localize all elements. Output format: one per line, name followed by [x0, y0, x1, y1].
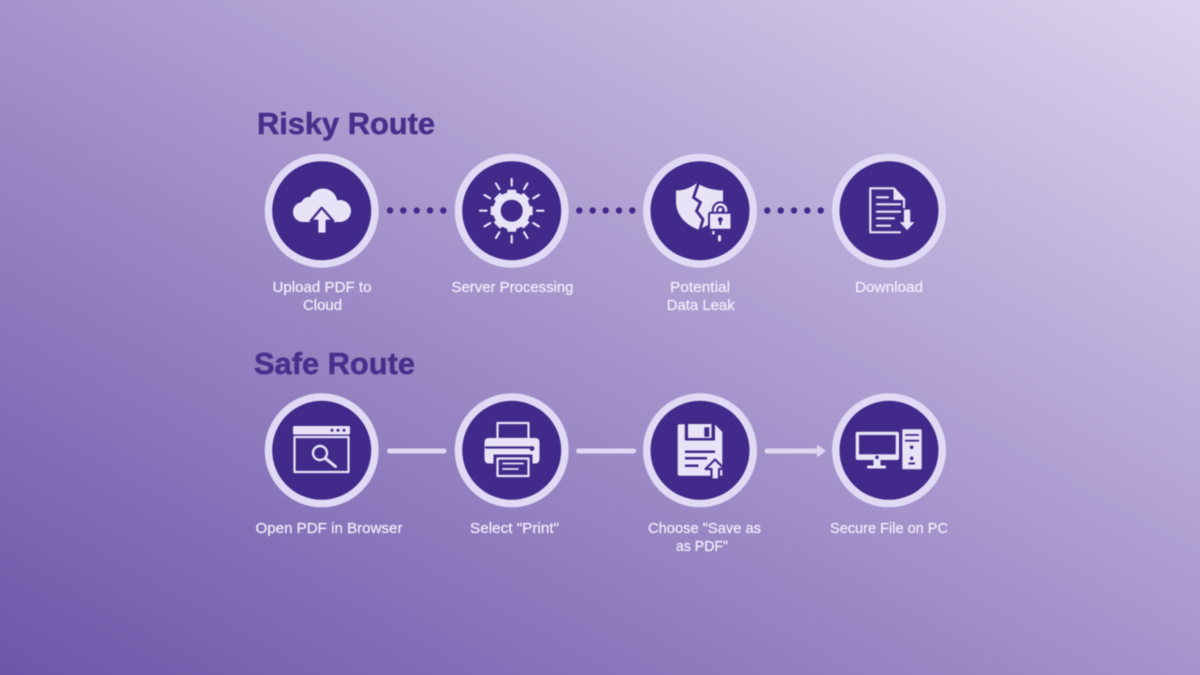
label: Server Processing [452, 279, 574, 296]
label: Data Leak [667, 297, 735, 314]
step: choose save as PDF [643, 393, 761, 555]
heading: safe route: Safe Route [254, 346, 415, 381]
step: potential data leak [643, 154, 757, 314]
step: upload PDF to cloud [265, 154, 379, 314]
icon: floppy disk with upload arrow [678, 424, 724, 480]
label: Potential [670, 279, 730, 296]
connector: dotted [576, 207, 636, 214]
label: Select "Print" [470, 520, 559, 537]
step: open PDF in browser [256, 393, 402, 537]
connector: dotted [387, 207, 446, 214]
step: download [832, 154, 946, 296]
icon: cloud upload [293, 188, 351, 234]
connector: dotted [764, 207, 824, 214]
label [648, 520, 761, 555]
icon: gear with rays [480, 179, 544, 242]
label: Choose "Save as [648, 520, 761, 537]
label: Open PDF in Browser [256, 520, 402, 537]
label [667, 279, 735, 314]
connector: arrow [767, 444, 826, 458]
icon: desktop computer [856, 429, 922, 469]
icon: printer [484, 423, 540, 476]
connector: solid line [390, 448, 444, 454]
panel: safe route [254, 346, 948, 555]
step: select print [455, 393, 569, 537]
label: as PDF" [676, 538, 728, 555]
icon: broken shield with lock [676, 183, 733, 242]
label [272, 279, 372, 314]
label: Upload PDF to [272, 279, 372, 296]
icon: browser with magnifier [293, 426, 350, 472]
heading: risky route: Risky Route [257, 106, 435, 141]
step: secure file on PC [830, 393, 948, 537]
step: server processing [452, 154, 574, 296]
panel: risky route [257, 106, 946, 314]
label: Cloud [303, 297, 342, 314]
label: Secure File on PC [830, 520, 948, 537]
label: Download [855, 279, 923, 296]
icon: document download [870, 188, 916, 232]
connector: solid line [578, 448, 634, 454]
